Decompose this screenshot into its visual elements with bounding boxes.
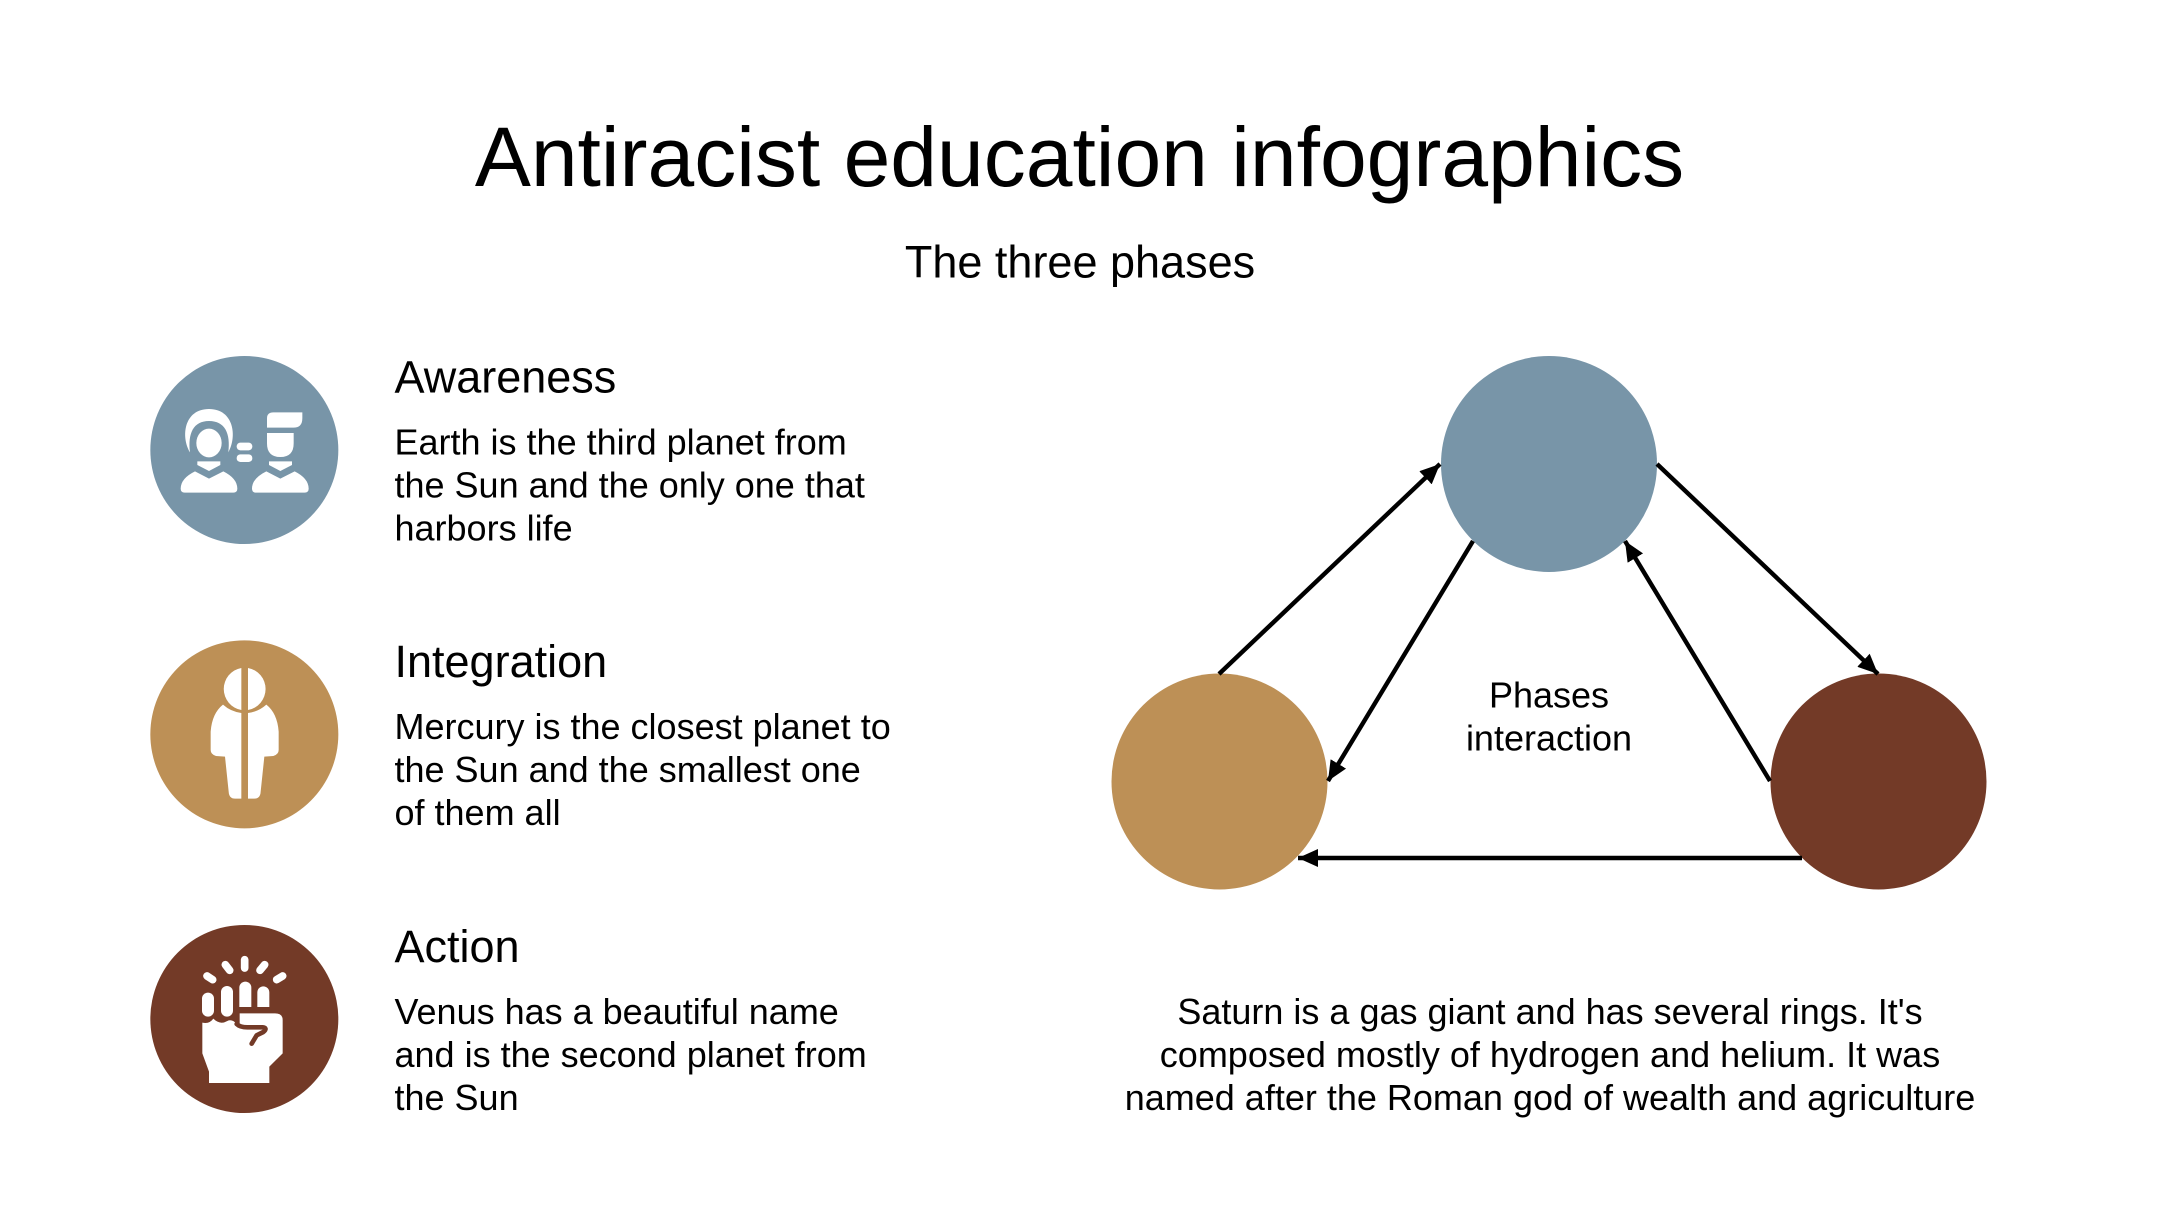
arrow: awareness to integration [1328, 541, 1473, 781]
text: awareness description: Earth is the third planet from [394, 422, 847, 462]
text: awareness description: the Sun and the only one that [394, 464, 865, 506]
heading: integration: Integration [394, 636, 607, 687]
icon: raised fist [150, 925, 338, 1113]
title: Antiracist education infographics [475, 110, 1684, 204]
text: saturn description: composed mostly of hydrogen and helium. It was [1160, 1034, 1940, 1075]
arrow: action to integration [1298, 856, 1802, 860]
arrow: action to awareness [1625, 541, 1770, 781]
text: action description: Venus has a beautiful name [394, 991, 839, 1032]
circle: awareness phase [1441, 356, 1657, 572]
heading: awareness: Awareness [394, 352, 616, 402]
circle: integration phase [1112, 674, 1328, 890]
arrow: awareness to action [1657, 464, 1878, 674]
text: saturn description: named after the Roman god of wealth and agriculture [1125, 1077, 1975, 1118]
panel: awareness [150, 352, 865, 548]
label: phases interaction: Phases [1489, 674, 1609, 716]
text: integration description: Mercury is the closest planet to [394, 706, 891, 747]
subtitle: The three phases [905, 236, 1255, 288]
text: integration description: the Sun and the smallest one [394, 749, 861, 790]
circle: action phase [1770, 674, 1986, 890]
text: awareness description: harbors life [394, 508, 573, 548]
icon: two people equal [150, 356, 338, 544]
label: phases interaction: interaction [1466, 718, 1632, 758]
text: action description: and is the second planet from [394, 1034, 867, 1075]
heading: action: Action [394, 921, 520, 972]
panel: integration [150, 636, 891, 833]
diagram: phases interaction [1112, 356, 1986, 890]
panel: action [150, 921, 867, 1118]
text: action description: the Sun [394, 1077, 519, 1118]
icon: divided person [150, 640, 338, 828]
arrow: integration to awareness [1219, 464, 1440, 674]
text: saturn description: Saturn is a gas giant and has several rings. It's [1177, 991, 1923, 1032]
text: integration description: of them all [394, 792, 561, 833]
